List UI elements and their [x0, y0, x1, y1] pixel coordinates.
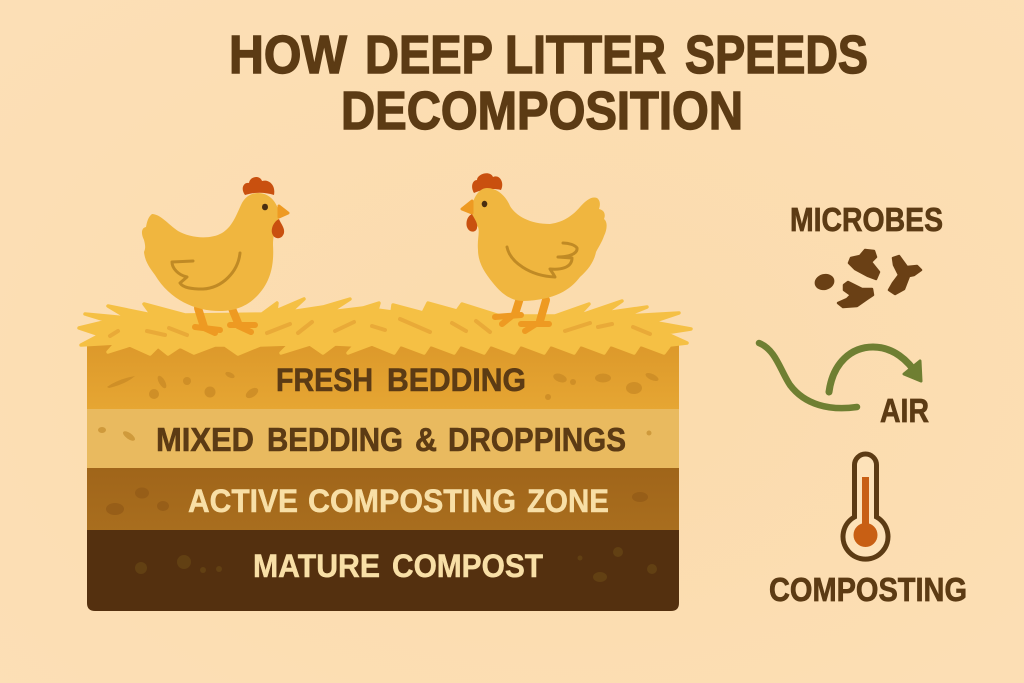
title: SPEEDS — [685, 25, 868, 85]
label: mixed bedding — [156, 421, 626, 458]
title — [229, 25, 868, 141]
label: fresh bedding: BEDDING — [387, 362, 526, 398]
layer: active composting zone — [87, 468, 679, 531]
chicken legs — [195, 306, 255, 333]
eye — [482, 201, 487, 207]
label: active composting: ACTIVE — [188, 483, 298, 519]
label: mixed bedding: & — [415, 421, 437, 458]
label: mixed bedding: MIXED — [156, 421, 254, 458]
chicken right — [462, 173, 607, 331]
label: active composting: COMPOSTING — [308, 483, 516, 519]
body — [472, 188, 607, 301]
icon: air arrows — [759, 343, 921, 408]
beak — [279, 206, 288, 217]
layer: fresh bedding — [87, 340, 679, 410]
label: air: AIR — [880, 392, 929, 429]
comb — [472, 173, 502, 193]
icon: microbes — [813, 250, 921, 307]
wing — [507, 243, 577, 277]
layer: mature compost — [87, 530, 679, 611]
label: fresh bedding: FRESH — [276, 362, 373, 398]
title: DECOMPOSITION — [341, 81, 743, 141]
wing — [172, 253, 240, 289]
wattle — [467, 214, 477, 232]
label: mature compost: MATURE — [253, 548, 380, 584]
beak — [462, 201, 472, 213]
label: mixed bedding: BEDDING — [267, 421, 403, 458]
label: active composting: ZONE — [527, 483, 609, 519]
straw bedding — [79, 299, 691, 354]
chicken legs — [495, 298, 549, 331]
title: HOW — [229, 25, 347, 85]
chicken left — [142, 177, 288, 333]
eye — [262, 204, 268, 210]
icon: thermometer — [843, 454, 888, 559]
heading: microbes: MICROBES — [790, 201, 943, 238]
title: LITTER — [505, 25, 666, 85]
comb — [243, 177, 274, 195]
label: fresh bedding — [276, 362, 526, 398]
title: DEEP — [365, 25, 493, 85]
label: active composting — [188, 483, 609, 519]
label: mixed bedding: DROPPINGS — [448, 421, 626, 458]
panel: litter layers — [87, 340, 679, 611]
label: mature compost — [253, 548, 543, 584]
label: mature compost: COMPOST — [392, 548, 543, 584]
wattle — [272, 219, 284, 238]
body — [142, 193, 279, 311]
label: composting: COMPOSTING — [769, 571, 967, 608]
layer: mixed bedding and droppings — [87, 409, 679, 469]
